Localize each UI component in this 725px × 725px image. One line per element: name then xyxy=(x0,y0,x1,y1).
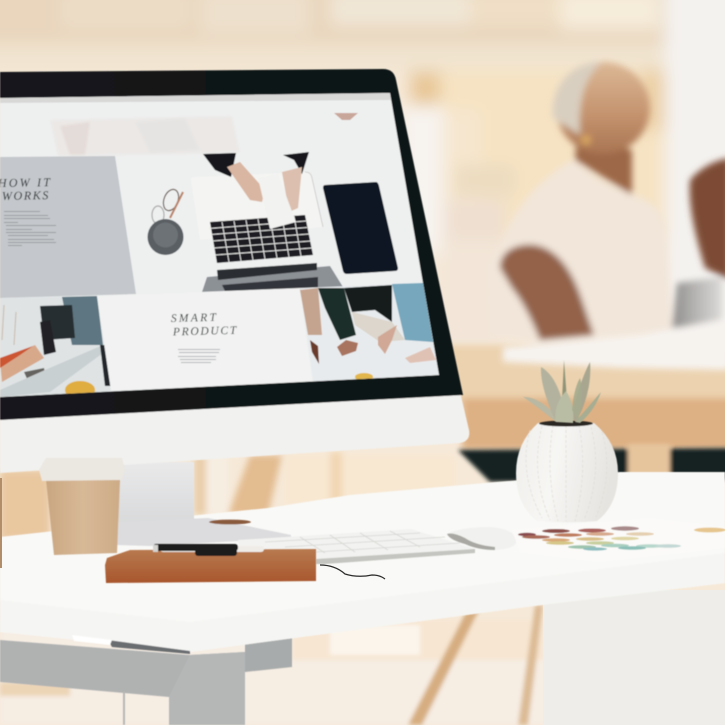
cup lid xyxy=(39,458,125,481)
second person's arm xyxy=(690,158,725,280)
stand neck xyxy=(118,462,194,522)
colour swatch sheet xyxy=(512,518,725,562)
grey metal desk frame xyxy=(0,636,292,725)
desk edge object at far left xyxy=(0,478,2,568)
logo reflection on stand base xyxy=(209,520,251,524)
notebook xyxy=(105,549,316,583)
small body copy lines xyxy=(4,211,56,246)
black tablet xyxy=(323,182,398,274)
chair leg right xyxy=(518,605,543,725)
monitor stand xyxy=(116,462,291,546)
shadow under desk edge xyxy=(108,640,190,654)
white papers on the far table xyxy=(503,318,725,370)
foreground area under the desk xyxy=(0,605,725,725)
right sleeve xyxy=(283,152,309,174)
right image: team at table xyxy=(300,283,439,382)
soil xyxy=(539,420,593,426)
desk leg xyxy=(169,652,245,725)
left sleeve xyxy=(203,153,236,177)
screen page background xyxy=(0,90,445,400)
heading second line: PRODUCT xyxy=(172,325,238,339)
succulent plant xyxy=(523,360,601,423)
front frame bar xyxy=(0,640,245,697)
round dark speaker xyxy=(148,219,184,255)
center white panel: smart product xyxy=(97,288,313,391)
desk surface xyxy=(0,472,725,652)
plant pot xyxy=(516,420,618,522)
cable xyxy=(320,565,385,579)
stand base xyxy=(116,518,291,546)
right hand xyxy=(282,167,302,212)
coffee cup xyxy=(39,458,125,555)
left hand xyxy=(227,162,265,202)
woman's short grey hair xyxy=(553,62,602,135)
monitor xyxy=(0,69,469,473)
small pink image corner xyxy=(334,113,358,120)
bottom-left office image xyxy=(0,296,111,399)
desk front edge shading xyxy=(0,553,725,652)
mouse xyxy=(447,527,517,550)
vase body xyxy=(516,422,618,522)
light reflection under desk edge xyxy=(72,635,112,645)
woman's earring xyxy=(581,135,591,145)
notebook with pen xyxy=(105,544,316,583)
keyboard xyxy=(238,529,475,564)
open lower laptop xyxy=(202,263,343,292)
heading second line: WORKS xyxy=(2,188,50,203)
black bezel xyxy=(0,69,463,420)
woman's neck xyxy=(575,135,632,195)
dark floor band behind the desk xyxy=(458,444,725,482)
blurred wooden table behind the desk xyxy=(0,345,725,540)
vase ribbing xyxy=(526,425,607,521)
small body copy lines xyxy=(178,349,220,363)
woman's head xyxy=(556,62,650,154)
pen xyxy=(153,544,264,556)
white cabinet below the desk xyxy=(543,590,725,725)
grey mug on the far table xyxy=(672,277,722,328)
heading: smart product: SMART xyxy=(171,312,218,325)
white phone xyxy=(259,184,296,230)
woman's bare arm xyxy=(500,245,594,340)
blurred seated woman xyxy=(486,62,725,370)
laptop keyboard xyxy=(209,215,313,263)
browser top strip xyxy=(0,92,391,103)
screen xyxy=(0,90,445,400)
grey panel: how it works xyxy=(0,156,136,298)
back frame bar xyxy=(245,636,292,672)
monitor chin xyxy=(0,392,469,473)
cup body xyxy=(46,480,120,555)
white desk top xyxy=(0,472,725,654)
laptop lid xyxy=(191,172,323,240)
faint marble banner image xyxy=(50,116,240,156)
chair leg diagonal xyxy=(408,608,480,725)
woman's shirt xyxy=(486,160,672,342)
glasses xyxy=(152,187,183,224)
